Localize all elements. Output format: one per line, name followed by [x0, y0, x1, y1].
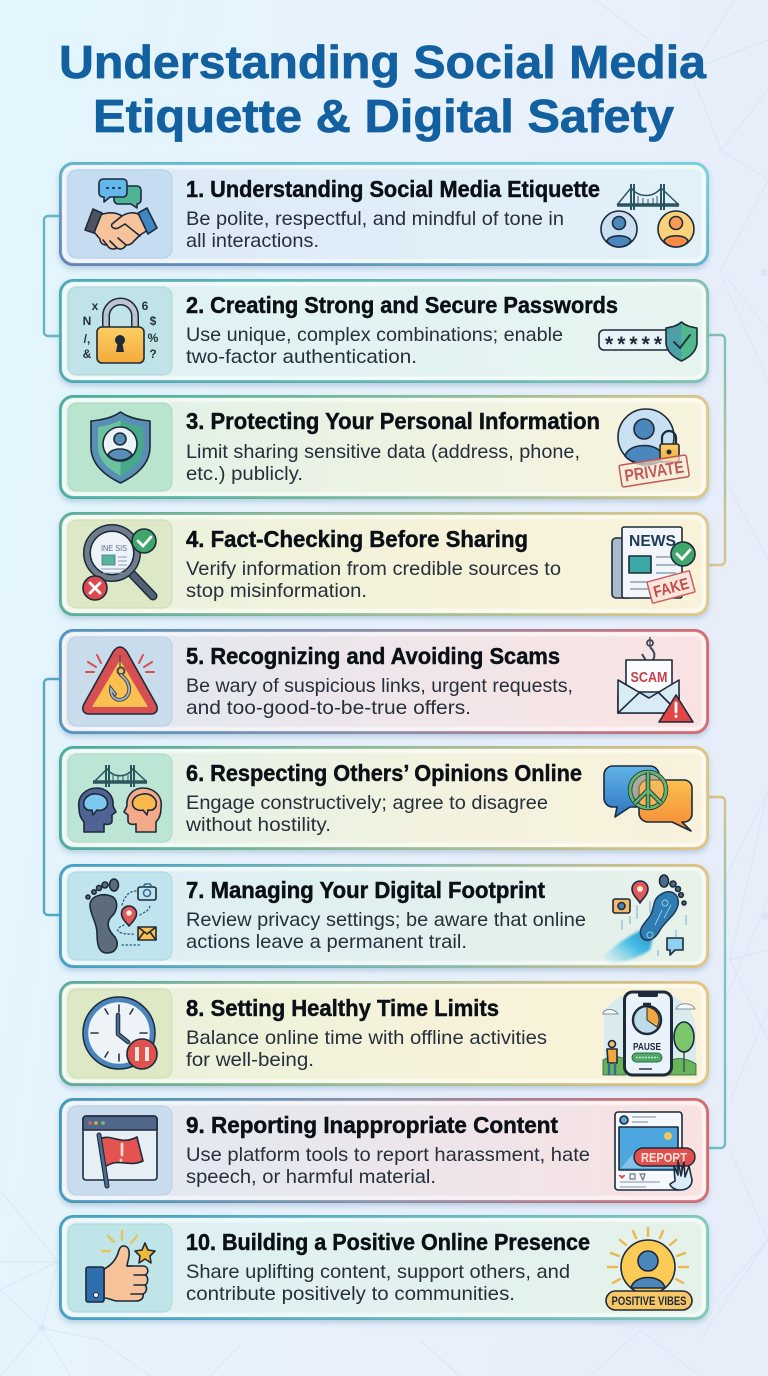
panel: item 10	[60, 1216, 708, 1318]
icon box: padlock: %	[148, 331, 159, 345]
connector: items 1 to 2	[44, 216, 60, 336]
panel: item 7	[60, 866, 708, 966]
icon box: two heads and bridge	[68, 754, 172, 842]
icon: positive vibes badge	[606, 1228, 692, 1310]
description: Review privacy settings; be aware that online	[186, 909, 586, 931]
panel: item 8	[60, 982, 708, 1084]
heading: 4. Fact-Checking Before Sharing	[186, 526, 528, 552]
icon box: padlock: /,	[84, 332, 90, 346]
description	[185, 792, 548, 836]
panel: item 4	[60, 514, 708, 614]
description: Engage constructively; agree to disagree	[186, 792, 548, 814]
description	[186, 1027, 547, 1071]
description: Be wary of suspicious links, urgent requests,	[186, 675, 573, 697]
description: for well-being.	[186, 1049, 314, 1071]
description: Balance online time with offline activities	[186, 1027, 547, 1049]
icon: positive vibes badge: POSITIVE VIBES	[612, 1296, 687, 1308]
icon box: padlock: 6	[142, 299, 149, 313]
icon: news with fake stamp	[612, 527, 695, 603]
heading: 3. Protecting Your Personal Information	[186, 408, 600, 434]
panel: item 6	[60, 748, 708, 848]
description	[186, 1144, 590, 1188]
description: two-factor authentication.	[186, 346, 417, 368]
icon: speech bubbles with peace sign	[604, 766, 692, 831]
heading: 5. Recognizing and Avoiding Scams	[186, 643, 560, 669]
icon box: magnifier: INE SIS	[101, 544, 127, 553]
description: Verify information from credible sources to	[186, 558, 561, 580]
icon: bridge and two people	[601, 184, 694, 247]
title: Understanding Social Media	[59, 36, 706, 88]
icon box: footprint trail	[68, 872, 172, 960]
title: Etiquette & Digital Safety	[93, 90, 674, 142]
icon box: thumbs up	[68, 1224, 172, 1312]
icon box: padlock: &	[83, 347, 92, 361]
description: actions leave a permanent trail.	[186, 931, 467, 953]
icon: phone with pause timer	[603, 992, 696, 1075]
heading: 1. Understanding Social Media Etiquette	[186, 176, 600, 202]
icon: news with fake stamp: NEWS	[629, 533, 676, 550]
connector: items 2 to 4	[708, 335, 725, 565]
icon box: padlock	[68, 287, 172, 375]
description: speech, or harmful material.	[186, 1166, 436, 1188]
description	[186, 558, 561, 602]
description: all interactions.	[186, 230, 319, 252]
description: Use platform tools to report harassment, hate	[186, 1144, 590, 1166]
panel: item 5	[60, 630, 708, 732]
heading: 7. Managing Your Digital Footprint	[186, 877, 545, 903]
icon: report post: REPORT	[641, 1150, 687, 1165]
icon box: warning hook	[68, 637, 172, 726]
icon: phone with pause timer: PAUSE	[633, 1042, 661, 1053]
icon: private profile: PRIVATE	[623, 457, 685, 486]
description	[186, 324, 563, 368]
icon: news with fake stamp: FAKE	[652, 576, 691, 601]
connector: items 6 to 9	[708, 797, 725, 1148]
description: contribute positively to communities.	[186, 1283, 515, 1305]
description	[186, 208, 564, 252]
heading: 10. Building a Positive Online Presence	[186, 1229, 590, 1255]
icon box: shield	[68, 403, 172, 491]
description: stop misinformation.	[186, 580, 367, 602]
panel: item 1	[60, 164, 708, 264]
description: without hostility.	[185, 814, 331, 836]
connector: items 5 to 7	[44, 679, 60, 915]
icon box: padlock: x	[92, 299, 99, 313]
description: Be polite, respectful, and mindful of tone in	[186, 208, 564, 230]
icon box: clock	[68, 989, 172, 1078]
description	[186, 675, 573, 719]
icon box: flag in browser window	[68, 1106, 172, 1195]
icon: password field and shield	[599, 322, 697, 361]
icon: digital footprint	[603, 875, 686, 964]
icon: scam email: SCAM	[630, 670, 668, 686]
icon box: handshake	[68, 170, 172, 258]
panel: item 2	[60, 280, 708, 382]
heading: 6. Respecting Others’ Opinions Online	[186, 760, 582, 786]
icon: scam email	[618, 637, 693, 722]
icon: private profile	[618, 409, 689, 487]
title	[59, 36, 706, 142]
description	[186, 1261, 570, 1305]
description	[186, 441, 580, 485]
icon box: padlock: N	[83, 314, 91, 328]
description: etc.) publicly.	[186, 463, 303, 485]
icon box: padlock: ?	[149, 347, 157, 361]
description: Limit sharing sensitive data (address, phone,	[186, 441, 580, 463]
heading: 8. Setting Healthy Time Limits	[186, 995, 499, 1021]
description: Use unique, complex combinations; enable	[186, 324, 563, 346]
panel: item 3	[60, 396, 708, 498]
icon box: padlock: $	[150, 314, 157, 328]
icon box: magnifier	[68, 520, 172, 608]
description: Share uplifting content, support others, and	[186, 1261, 570, 1283]
panel: item 9	[60, 1100, 708, 1202]
heading: 9. Reporting Inappropriate Content	[186, 1112, 558, 1138]
heading: 2. Creating Strong and Secure Passwords	[186, 292, 618, 318]
icon: password field and shield: *****	[605, 333, 663, 356]
description: and too-good-to-be-true offers.	[186, 697, 471, 719]
icon: report post	[615, 1112, 695, 1190]
description	[186, 909, 586, 953]
